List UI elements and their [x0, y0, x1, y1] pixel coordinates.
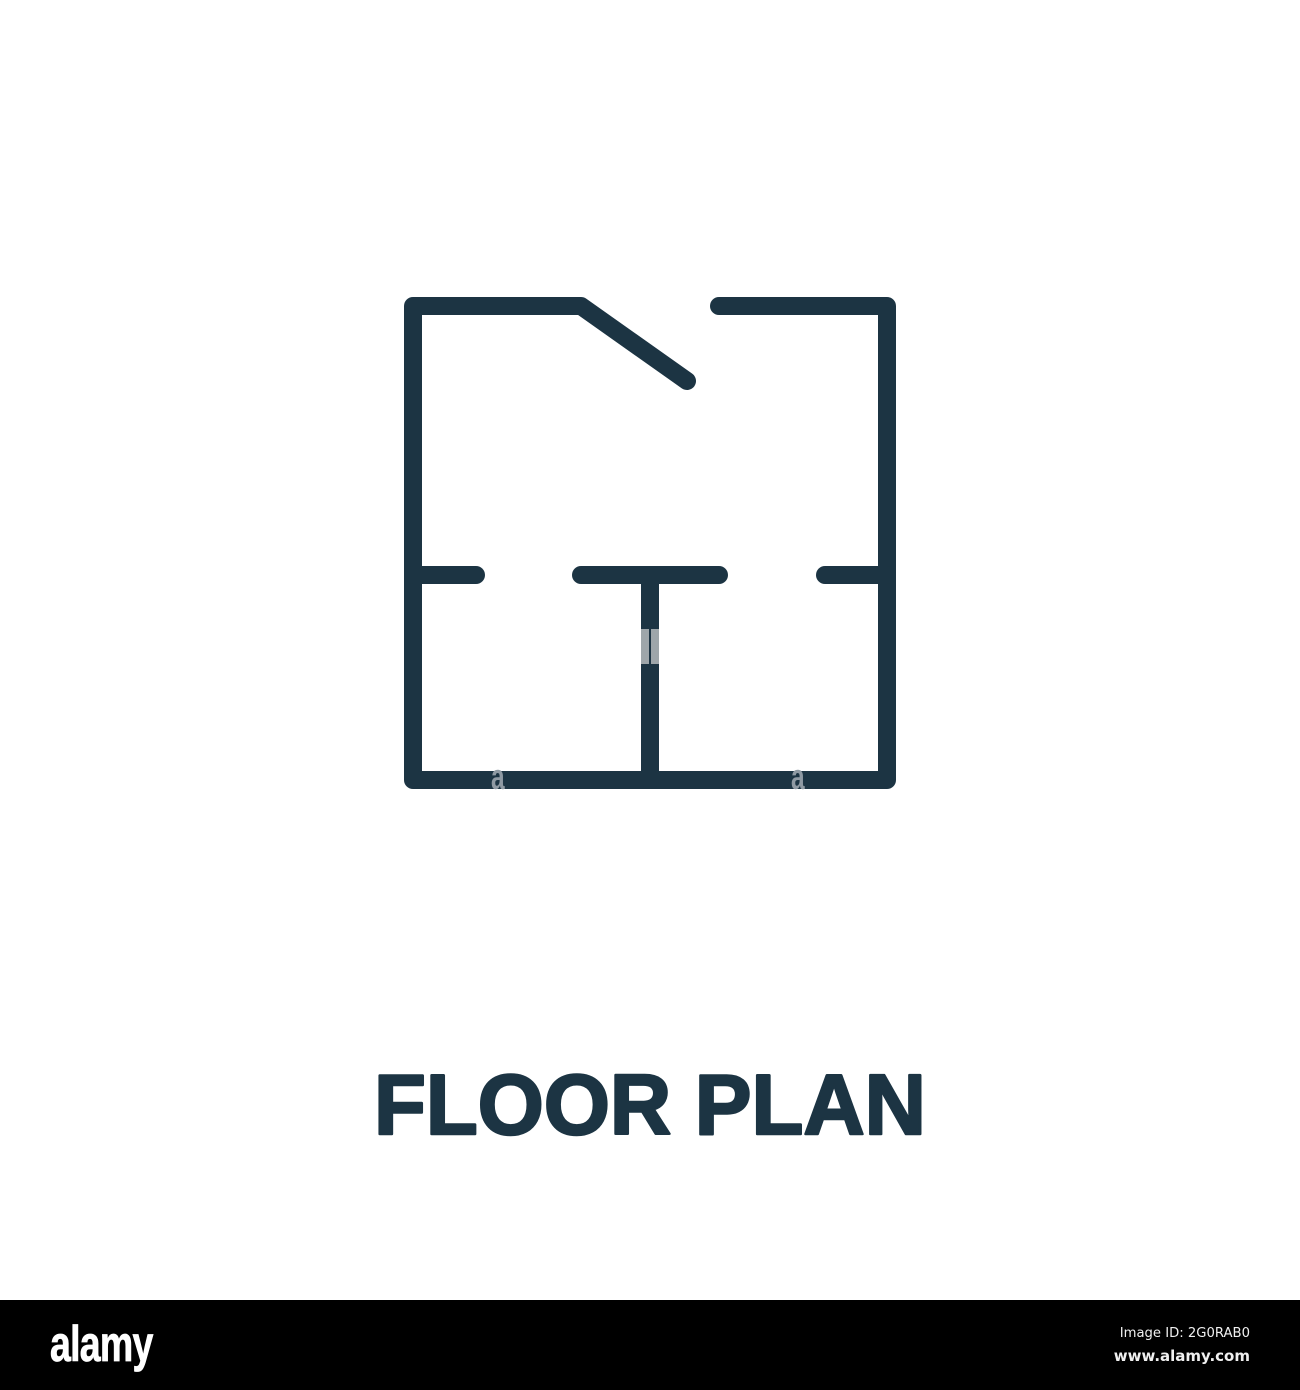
title: FLOOR PLAN	[374, 1058, 926, 1153]
right wall stub	[825, 566, 887, 584]
left wall stub	[413, 566, 476, 584]
watermark fragment on right bottom wall: a	[791, 756, 805, 797]
website: www.alamy.com	[1114, 1347, 1250, 1365]
image id: Image ID: 2G0RAB0	[1120, 1326, 1250, 1341]
icon: floor plan	[413, 306, 887, 780]
watermark fragment on left bottom wall: a	[491, 756, 505, 797]
central T-shaped partition	[581, 575, 719, 780]
footer logo: alamy	[50, 1317, 154, 1372]
footer band	[0, 1300, 1300, 1390]
outer walls and open door	[413, 306, 887, 780]
watermark fragment on partition	[641, 629, 659, 664]
